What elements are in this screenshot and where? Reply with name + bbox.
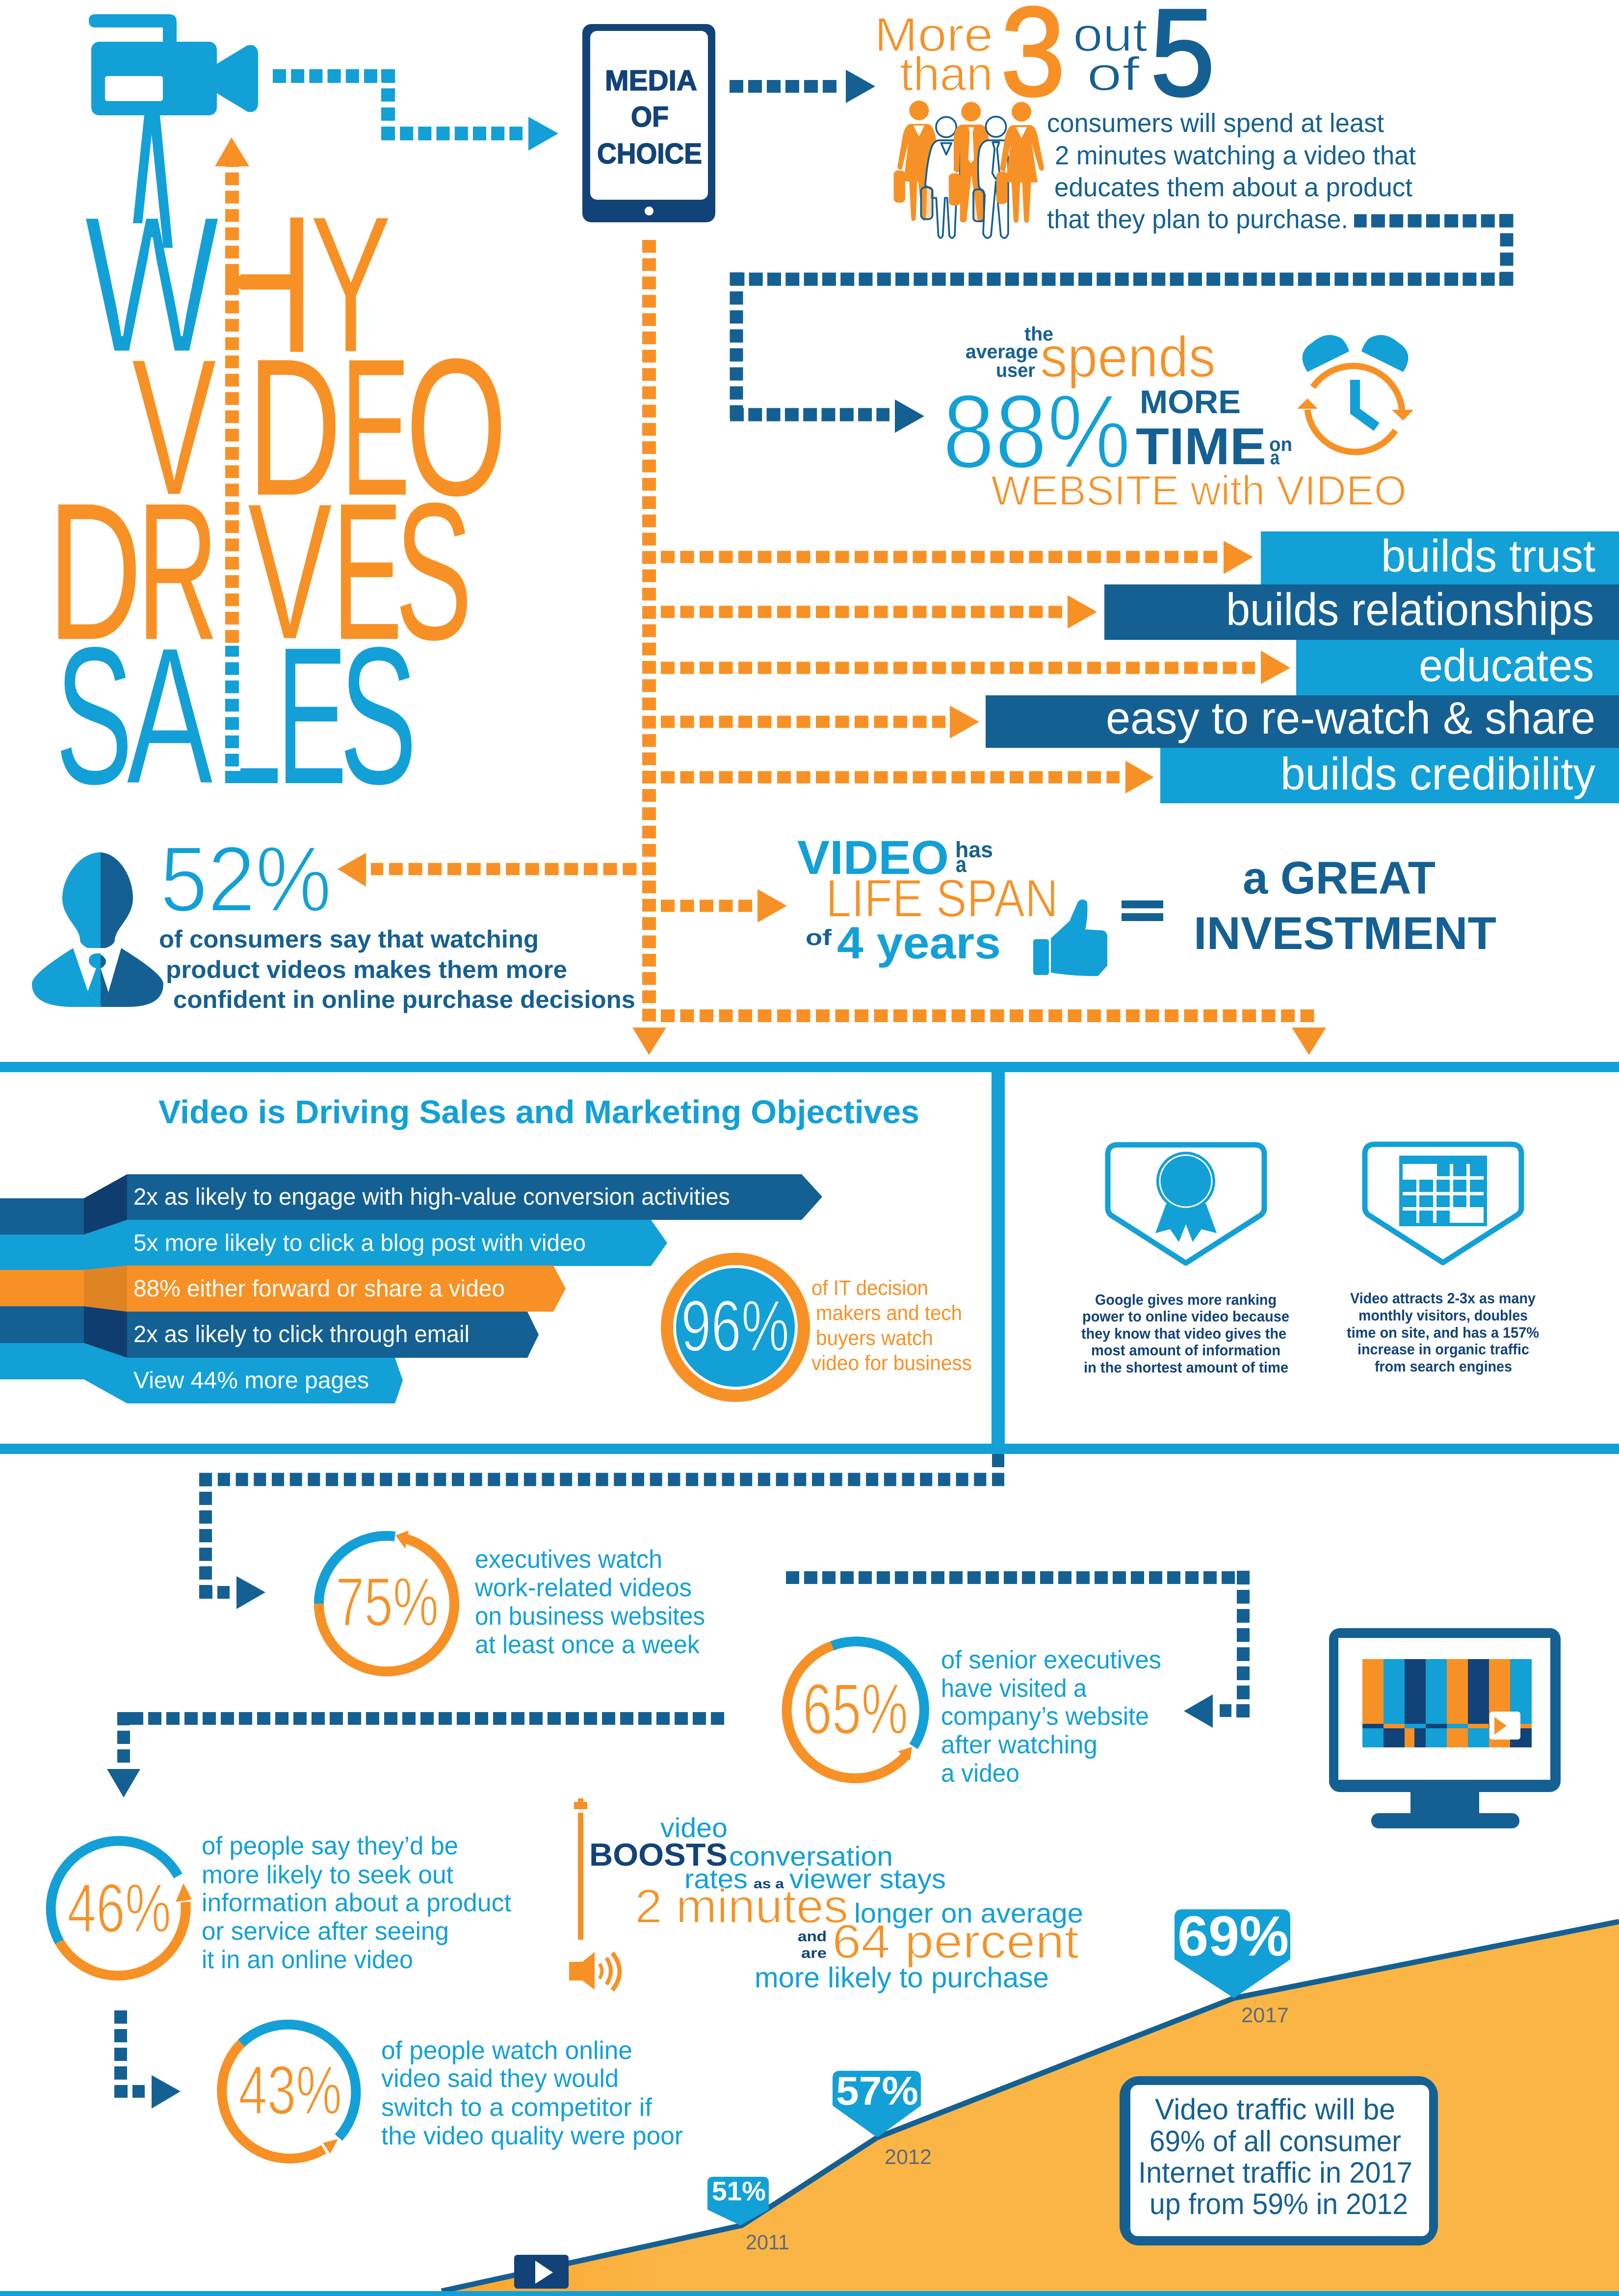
ribbon: 88 percent forward — [127, 1266, 566, 1312]
stat: video boosts conversion: viewer stays — [789, 1863, 946, 1894]
stat: video boosts conversion: as a — [754, 1876, 784, 1891]
text: executives watch — [474, 1545, 705, 1659]
arrow: camera to tablet — [273, 69, 558, 151]
ribbon: 5x blog post: 5x more likely to click a blog post with video — [133, 1230, 586, 1256]
text: switch to a competitor — [381, 2036, 683, 2150]
text: video attracts visitors — [1347, 1290, 1539, 1375]
text: executives watch: at least once a week — [475, 1631, 700, 1659]
benefit row: easy to re-watch and share: easy to re-watch & share — [1106, 692, 1595, 743]
callout: video traffic: Video traffic will be — [1155, 2093, 1395, 2126]
text: senior executives: a video — [941, 1759, 1019, 1788]
bottom band — [0, 2291, 1619, 2296]
stat: video boosts conversion: conversation — [729, 1841, 893, 1872]
text: video attracts visitors: increase in organic traffic — [1358, 1341, 1529, 1358]
text: consumers will spend: educates them about a product — [1054, 173, 1412, 202]
benefit row: educates — [661, 640, 1619, 695]
ribbon: 2x click through — [127, 1312, 539, 1358]
stat: 88 percent more time: average — [966, 341, 1038, 363]
stat: 88 percent more time: 88% — [942, 373, 1131, 490]
arrow: to 46 percent — [107, 1712, 724, 1797]
icon: tablet media of choice: MEDIA — [605, 65, 697, 97]
arrow: up through title, blue section — [225, 646, 239, 766]
stat: 52 percent confident: confident in online purchase decisions — [173, 986, 635, 1013]
benefit row: builds relationships: builds relationships — [1226, 584, 1594, 635]
ring: 43 percent: 43% — [238, 2051, 342, 2129]
text: IT decision makers: buyers watch — [816, 1326, 933, 1350]
main orange vertical connector — [642, 240, 656, 1022]
marker: 57 percent 2012: 57% — [836, 2069, 918, 2113]
arrow: section to 75 percent — [199, 1454, 1004, 1609]
stat: 88 percent more time: TIME — [1136, 418, 1266, 475]
ribbon: 2x engage — [127, 1174, 822, 1220]
stat: 52 percent confident: product videos makes them more — [166, 956, 567, 983]
callout: video traffic — [1120, 2076, 1438, 2245]
icon: tablet media of choice: OF — [631, 101, 669, 133]
icon: group of business people — [894, 101, 1044, 238]
ring: 75 percent: 75% — [336, 1563, 439, 1640]
icon: video camera — [89, 14, 258, 115]
stat: more than 3 out of 5 — [874, 0, 1215, 122]
text: executives watch: on business websites — [475, 1602, 705, 1631]
text: video attracts visitors: monthly visitors, doubles — [1358, 1307, 1528, 1324]
text: google ranking: power to online video because — [1082, 1308, 1289, 1325]
stat: video boosts conversion: and — [798, 1928, 827, 1945]
ribbon: 5x blog post — [127, 1220, 667, 1266]
title: why video drives sales: S — [395, 463, 472, 681]
icon: thumbs up — [1033, 899, 1107, 976]
callout: video traffic: Internet traffic in 2017 — [1138, 2156, 1412, 2189]
title: why video drives sales: I — [212, 318, 252, 536]
title: why video drives sales: A — [127, 607, 214, 825]
title: why video drives sales: I — [212, 462, 252, 681]
title: why video drives sales: V — [247, 462, 333, 681]
icon: ribbon award badge — [1108, 1145, 1264, 1263]
marker: 57 percent 2012 — [833, 2069, 932, 2169]
text: people more likely — [202, 1832, 512, 1974]
marker: 57 percent 2012: 2012 — [885, 2145, 932, 2169]
benefit row: easy to re-watch and share — [661, 692, 1619, 748]
ribbon: view 44 percent: View 44% more pages — [133, 1368, 369, 1394]
benefit row: builds trust — [661, 530, 1619, 584]
text: people more likely: information about a product — [202, 1889, 512, 1917]
text: people more likely: of people say they’d be — [202, 1832, 458, 1860]
arrow: to video life span — [661, 889, 787, 923]
ribbon: view 44 percent — [127, 1358, 403, 1403]
marker: 69 percent 2017: 69% — [1177, 1905, 1289, 1968]
stat: video boosts conversion: rates — [684, 1863, 748, 1894]
text: switch to a competitor: of people watch online — [381, 2036, 632, 2065]
text: senior executives: of senior executives — [941, 1646, 1161, 1674]
ring: 46 percent — [51, 1841, 192, 1976]
arrow: split down to next section — [632, 1016, 1326, 1055]
icon: equals sign — [1122, 900, 1163, 921]
text: switch to a competitor: the video quality were poor — [381, 2122, 683, 2150]
title: why video drives sales: E — [341, 317, 410, 536]
text: senior executives: have visited a — [941, 1674, 1087, 1703]
stat: 88 percent more time: spends — [1040, 325, 1216, 390]
text: senior executives — [941, 1646, 1161, 1788]
stat: video boosts conversion: 2 minutes — [635, 1879, 848, 1933]
heading: video is driving sales: Video is Driving Sales and Marketing Objectives — [158, 1094, 919, 1131]
text: IT decision makers: makers and tech — [816, 1301, 962, 1325]
ribbon: 88 percent forward: 88% either forward or share a video — [133, 1276, 505, 1302]
benefit row: builds relationships — [661, 584, 1619, 640]
text: senior executives: after watching — [941, 1731, 1097, 1759]
icon: volume slider and speaker — [569, 1798, 620, 1990]
text: people more likely: or service after seeing — [202, 1917, 449, 1946]
text: people more likely: it in an online video — [202, 1946, 413, 1974]
stat: more than 3 out of 5: More — [874, 8, 993, 61]
title: why video drives sales: S — [339, 607, 417, 825]
text: consumers will spend — [1047, 108, 1416, 234]
arrow: to 43 percent — [114, 2010, 181, 2109]
title: why video drives sales: D — [247, 317, 342, 536]
stat: more than 3 out of 5: than — [900, 47, 993, 101]
text: IT decision makers — [811, 1276, 972, 1375]
stat: 88 percent more time: MORE — [1140, 384, 1241, 421]
text: a great investment — [1194, 852, 1496, 959]
stat: 52 percent confident — [159, 827, 635, 1013]
stat: 88 percent more time: user — [996, 360, 1035, 381]
icon: tablet media of choice: CHOICE — [597, 138, 702, 170]
title: why video drives sales: R — [137, 462, 218, 681]
icon: business person — [32, 852, 163, 1007]
callout: video traffic: 69% of all consumer — [1149, 2125, 1401, 2158]
stat: 88 percent more time: the — [1024, 323, 1053, 345]
text: switch to a competitor: switch to a competitor if — [381, 2093, 653, 2122]
text: consumers will spend: consumers will spend at least — [1047, 108, 1384, 138]
text: consumers will spend: that they plan to purchase. — [1047, 205, 1348, 234]
stat: video life span of 4 years: has — [955, 837, 993, 862]
stat: video life span of 4 years: 4 years — [837, 918, 1001, 968]
title: why video drives sales: V — [131, 318, 217, 536]
arrow: up through title, orange — [215, 137, 249, 643]
title: why video drives sales: Y — [310, 175, 392, 394]
stat: video life span of 4 years: a — [956, 852, 967, 877]
ring: 46 percent: 46% — [67, 1869, 171, 1947]
text: google ranking: in the shortest amount of time — [1084, 1359, 1288, 1376]
area chart: video traffic — [442, 1905, 1619, 2291]
ring: 75 percent — [319, 1531, 454, 1671]
text: google ranking: they know that video gives the — [1081, 1325, 1286, 1342]
stat: 88 percent more time: on — [1269, 434, 1292, 455]
benefit row: educates: educates — [1419, 640, 1594, 691]
stat: video boosts conversion: 64 percent — [832, 1915, 1079, 1968]
arrow: to 52 percent — [338, 853, 656, 887]
stat: video life span of 4 years: VIDEO — [797, 831, 949, 884]
stat: video boosts conversion: longer on average — [854, 1898, 1083, 1928]
icon: desktop monitor — [1329, 1628, 1561, 1828]
benefit row: builds credibility — [661, 748, 1619, 803]
callout: video traffic: up from 59% in 2012 — [1149, 2188, 1408, 2220]
stat: video boosts conversion: more likely to purchase — [755, 1962, 1049, 1994]
text: IT decision makers: video for business — [811, 1351, 972, 1375]
stat: video boosts conversion: are — [801, 1945, 827, 1961]
icon: alarm clock — [1297, 335, 1413, 452]
title: why video drives sales — [48, 175, 507, 825]
stat: video life span of 4 years: of — [806, 925, 832, 950]
text: video attracts visitors: time on site, and has a 157% — [1347, 1324, 1539, 1341]
title: why video drives sales: D — [48, 462, 142, 681]
stat: video life span of 4 years: LIFE SPAN — [826, 869, 1058, 928]
text: people more likely: more likely to seek out — [202, 1861, 454, 1889]
ring: 65 percent: 65% — [803, 1669, 908, 1749]
arrow: to 65 percent — [786, 1571, 1250, 1728]
marker: 69 percent 2017 — [1175, 1905, 1290, 2027]
ribbon: 2x click through: 2x as likely to click through email — [133, 1321, 470, 1347]
stat: 88 percent more time: WEBSITE with VIDEO — [991, 468, 1407, 514]
stat: more than 3 out of 5: out — [1073, 8, 1148, 61]
stat: video boosts conversion: video — [660, 1812, 728, 1843]
title: why video drives sales: O — [405, 317, 507, 536]
text: executives watch: executives watch — [475, 1545, 662, 1574]
stat: more than 3 out of 5: of — [1087, 47, 1140, 101]
stat: video boosts conversion — [589, 1812, 1083, 1994]
benefit row: builds trust: builds trust — [1381, 530, 1595, 581]
title: why video drives sales: H — [214, 176, 314, 394]
section frame lines — [0, 1062, 1619, 1454]
stat: 52 percent confident: of consumers say that watching — [159, 925, 539, 953]
arrow: long navy connector to 88 percent — [730, 214, 1513, 433]
ribbon: 2x engage: 2x as likely to engage with high-value conversion activities — [133, 1184, 730, 1210]
title: why video drives sales: E — [277, 607, 347, 825]
stat: 52 percent confident: 52% — [160, 827, 332, 931]
title: why video drives sales: W — [84, 176, 221, 394]
arrow: tablet to statistic — [730, 70, 875, 103]
marker: 69 percent 2017: 2017 — [1241, 2004, 1289, 2027]
benefit row: builds credibility: builds credibility — [1280, 748, 1595, 799]
stat: 96 percent circle: 96% — [681, 1286, 789, 1367]
text: switch to a competitor: video said they would — [381, 2064, 619, 2093]
marker: 51 percent 2011 — [707, 2176, 789, 2254]
text: senior executives: company’s website — [941, 1702, 1149, 1731]
text: google ranking — [1081, 1291, 1289, 1376]
text: video attracts visitors: from search engines — [1375, 1358, 1512, 1375]
ribbon chart — [0, 1174, 822, 1403]
text: google ranking: Google gives more ranking — [1095, 1291, 1277, 1308]
title: why video drives sales: L — [215, 607, 282, 825]
icon: camera tripod — [133, 115, 173, 248]
marker: 51 percent 2011: 2011 — [746, 2231, 789, 2254]
text: video attracts visitors: Video attracts 2-3x as many — [1350, 1290, 1536, 1307]
icon: calendar badge — [1365, 1144, 1521, 1263]
stat: 96 percent circle — [661, 1253, 810, 1402]
stat: 88 percent more time — [942, 323, 1407, 514]
ring: 65 percent — [787, 1641, 924, 1778]
text: a great investment: INVESTMENT — [1194, 907, 1496, 959]
marker: 51 percent 2011: 51% — [712, 2176, 766, 2206]
text: consumers will spend: 2 minutes watching a video that — [1055, 141, 1416, 170]
icon: tablet media of choice — [582, 24, 715, 222]
text: IT decision makers: of IT decision — [811, 1276, 928, 1300]
icon: play button — [514, 2255, 569, 2289]
text: a great investment: a GREAT — [1243, 852, 1436, 903]
text: executives watch: work-related videos — [474, 1574, 692, 1602]
stat: video boosts conversion: BOOSTS — [589, 1837, 728, 1873]
stat: video life span of 4 years — [797, 831, 1058, 968]
title: why video drives sales: S — [55, 607, 133, 825]
ring: 43 percent — [222, 2025, 356, 2159]
title: why video drives sales: E — [333, 462, 402, 681]
text: google ranking: most amount of information — [1091, 1342, 1280, 1359]
stat: 88 percent more time: a — [1270, 447, 1280, 469]
